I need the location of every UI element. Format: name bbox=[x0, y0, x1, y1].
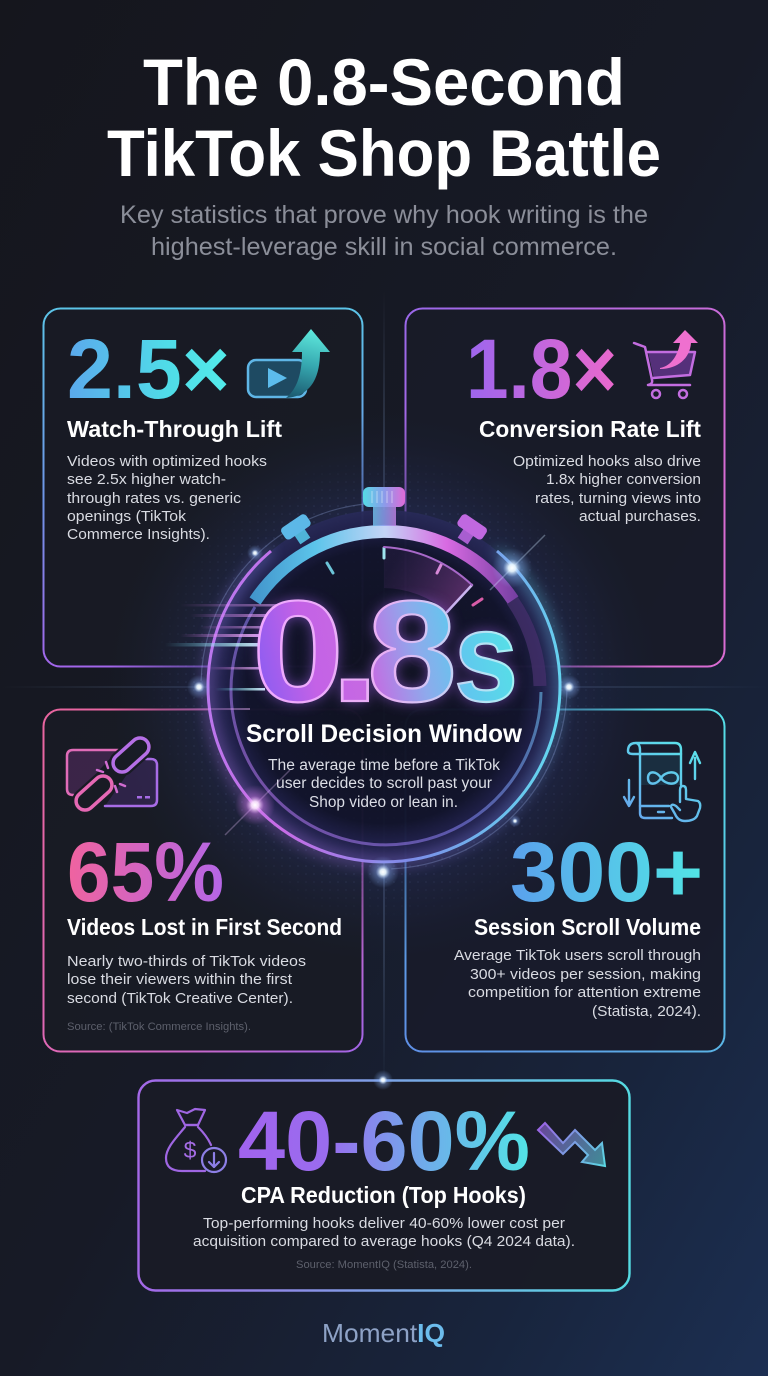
center description: The average time before a TikTok bbox=[268, 757, 500, 774]
heading: Session Scroll Volume bbox=[474, 914, 701, 940]
description: Average TikTok users scroll through bbox=[454, 947, 701, 964]
source: Source: (TikTok Commerce Insights). bbox=[67, 1021, 251, 1033]
speed streaks bbox=[160, 604, 285, 710]
icon: downward trend arrow bbox=[538, 1123, 605, 1166]
description: Videos with optimized hooks bbox=[67, 453, 267, 470]
icon: video with rising arrow bbox=[248, 329, 330, 398]
icon: infinite scroll phone bbox=[624, 743, 700, 821]
description: competition for attention extreme bbox=[468, 984, 701, 1001]
light beam horizontal bbox=[0, 686, 768, 688]
number 1.8x: 1.8× bbox=[466, 322, 617, 416]
dial ticks bbox=[327, 547, 482, 612]
panel: watch-through lift card frame bbox=[44, 308, 362, 666]
description bbox=[513, 453, 701, 525]
description: Optimized hooks also drive bbox=[513, 453, 701, 470]
icon: broken chain on card bbox=[67, 734, 157, 814]
description bbox=[193, 1215, 575, 1250]
panel: CPA reduction bbox=[138, 1070, 630, 1290]
outer ring glow bbox=[208, 551, 560, 862]
description: Top-performing hooks deliver 40-60% lower cost per bbox=[203, 1215, 565, 1232]
heading: Videos Lost in First Second bbox=[67, 914, 342, 940]
stat: watch-through lift bbox=[67, 322, 330, 543]
card frame bbox=[138, 1080, 630, 1290]
title bbox=[107, 45, 661, 190]
center description bbox=[268, 757, 500, 811]
big number 0.8s: 8 bbox=[367, 571, 457, 732]
big number glow: 8 bbox=[367, 571, 457, 732]
number 40-60%: 40-60% bbox=[238, 1094, 530, 1188]
outer ring bbox=[208, 551, 560, 862]
icon: money bag: $ bbox=[184, 1137, 197, 1163]
left button bbox=[279, 513, 318, 549]
crown bbox=[363, 487, 405, 526]
center description: Shop video or lean in. bbox=[309, 794, 458, 811]
description bbox=[67, 953, 306, 1007]
description bbox=[454, 947, 701, 1020]
stat: conversion rate lift bbox=[466, 322, 701, 525]
description: through rates vs. generic bbox=[67, 490, 242, 507]
heading: CPA Reduction (Top Hooks) bbox=[241, 1182, 526, 1208]
big number glow: 0 bbox=[252, 571, 344, 732]
big number glow: s bbox=[454, 586, 518, 729]
description: Commerce Insights). bbox=[67, 526, 210, 543]
stat: videos lost in first second bbox=[67, 734, 342, 1033]
center heading: Scroll Decision Window bbox=[246, 720, 523, 748]
title: The 0.8-Second bbox=[143, 45, 625, 119]
faint outer halo ring bbox=[201, 503, 567, 869]
big number glow: . bbox=[330, 571, 380, 732]
big number 0.8s: . bbox=[330, 571, 380, 732]
stopwatch body band bbox=[255, 531, 513, 601]
big number 0.8s: s bbox=[454, 586, 518, 729]
light beam vertical bbox=[383, 290, 385, 1090]
number 300+: 300+ bbox=[510, 825, 703, 919]
icon: cart with rising arrow bbox=[634, 330, 698, 398]
description: openings (TikTok bbox=[67, 508, 187, 525]
heading: Watch-Through Lift bbox=[67, 416, 282, 442]
icon: money bag bbox=[166, 1109, 226, 1172]
top spark bbox=[373, 1070, 393, 1090]
number 2.5x: 2.5× bbox=[67, 322, 230, 416]
description bbox=[67, 453, 267, 543]
panel: conversion rate card frame bbox=[406, 308, 724, 666]
subtitle: Key statistics that prove why hook writing is the bbox=[120, 201, 648, 229]
dark inner band bbox=[512, 600, 540, 686]
center description: user decides to scroll past your bbox=[276, 775, 492, 792]
panel: videos lost card frame bbox=[44, 710, 362, 1052]
description: Nearly two-thirds of TikTok videos bbox=[67, 953, 306, 970]
description: 300+ videos per session, making bbox=[470, 966, 701, 983]
inner ring bbox=[231, 607, 541, 845]
description: (Statista, 2024). bbox=[592, 1003, 701, 1020]
dotted halo around stopwatch bbox=[162, 466, 602, 906]
stopwatch bbox=[160, 487, 581, 888]
footer logo: MomentIQ bbox=[322, 1318, 445, 1348]
stat: session scroll volume bbox=[454, 743, 703, 1020]
heading: Conversion Rate Lift bbox=[479, 416, 701, 442]
panel: scroll volume card frame bbox=[406, 710, 724, 1052]
description: 1.8x higher conversion bbox=[546, 471, 701, 488]
subtitle bbox=[120, 201, 648, 261]
ring sparkles bbox=[187, 535, 581, 888]
description: see 2.5x higher watch- bbox=[67, 471, 226, 488]
dial disc bbox=[208, 510, 560, 862]
description: actual purchases. bbox=[579, 508, 701, 525]
subtitle: highest-leverage skill in social commerce. bbox=[151, 233, 617, 261]
number 65%: 65% bbox=[67, 825, 224, 919]
big number 0.8s: 0 bbox=[252, 571, 344, 732]
progress wedge bbox=[384, 547, 472, 612]
description: second (TikTok Creative Center). bbox=[67, 990, 293, 1007]
description: rates, turning views into bbox=[535, 490, 701, 507]
description: lose their viewers within the first bbox=[67, 971, 293, 988]
background glow behind stopwatch bbox=[109, 412, 659, 962]
source: Source: MomentIQ (Statista, 2024). bbox=[296, 1259, 472, 1271]
title: TikTok Shop Battle bbox=[107, 116, 661, 190]
description: acquisition compared to average hooks (Q4 2024 data). bbox=[193, 1233, 575, 1250]
right button bbox=[450, 513, 489, 549]
